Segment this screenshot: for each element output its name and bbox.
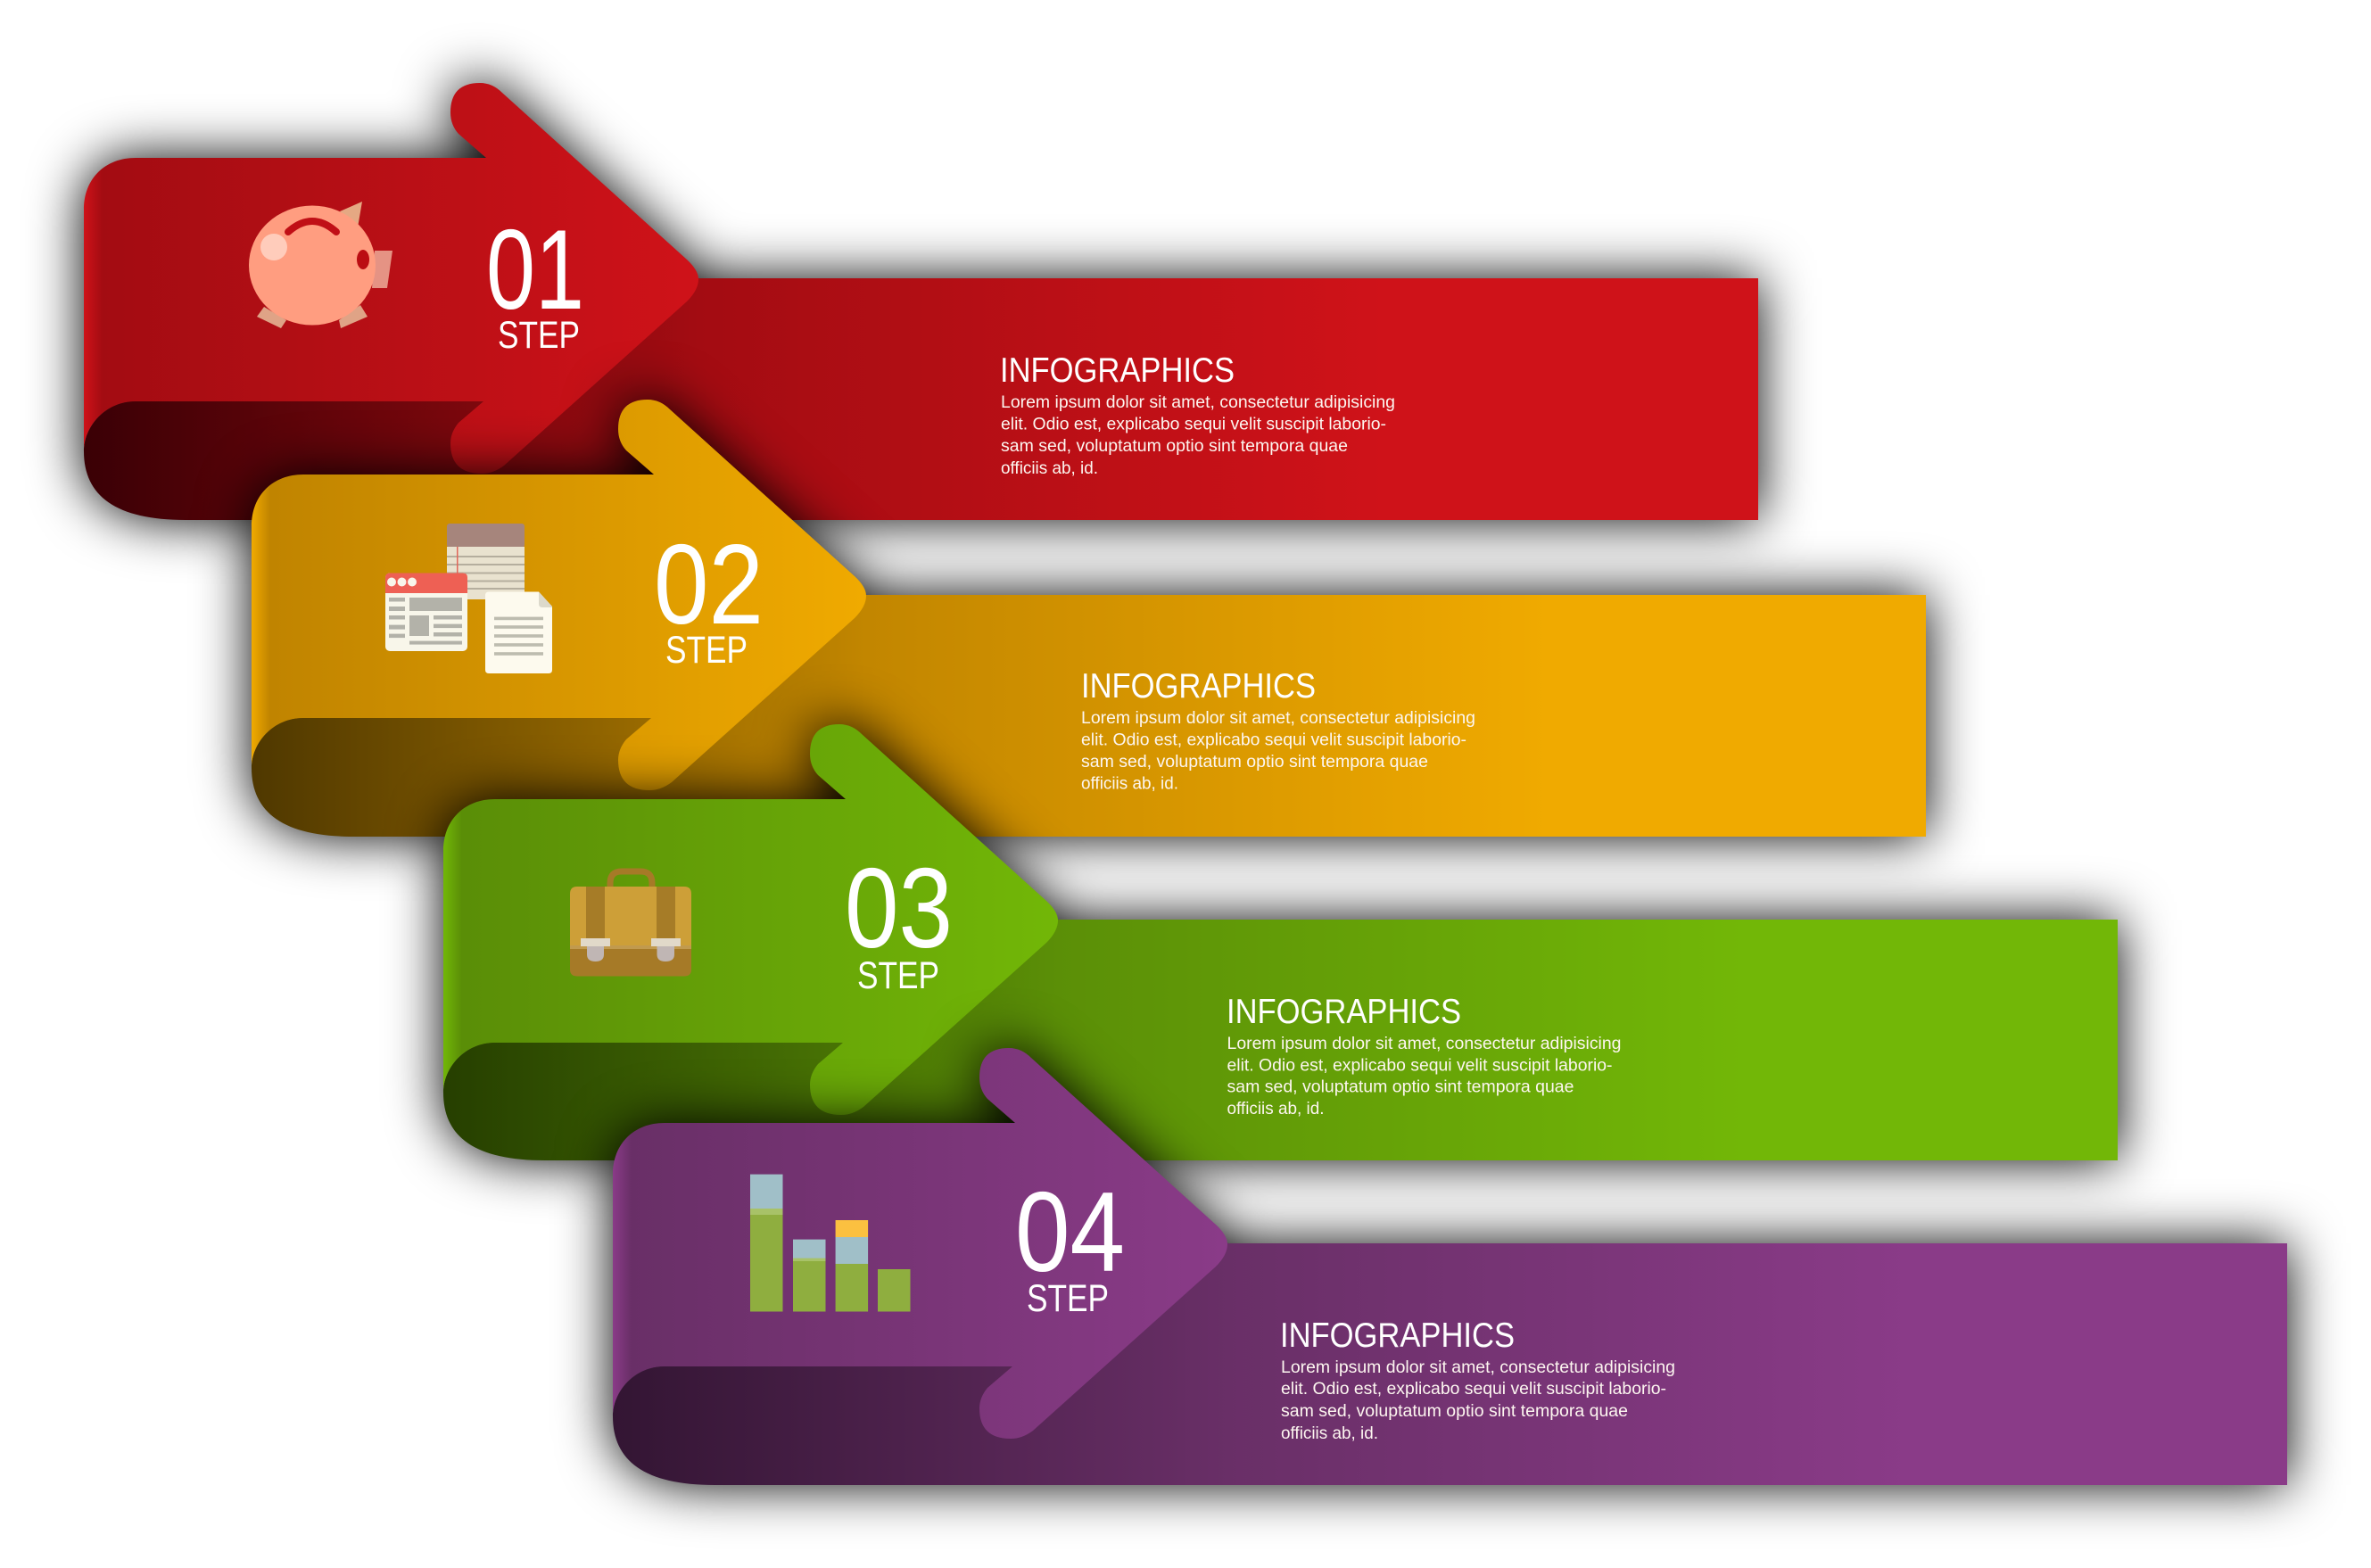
body text: sam sed, voluptatum optio sint tempora quae	[1001, 436, 1348, 456]
body text: elit. Odio est, explicabo sequi velit suscipit laborio-	[1227, 1056, 1613, 1076]
heading: INFOGRAPHICS	[1227, 993, 1461, 1031]
body text	[1281, 1358, 1675, 1443]
step number 04: 04	[1015, 1168, 1125, 1295]
step label: STEP	[665, 629, 748, 672]
icon: briefcase	[570, 871, 691, 976]
panel: step 3	[443, 724, 2118, 1160]
icon: piggy bank	[249, 202, 392, 328]
panel: step 1	[84, 83, 1758, 520]
ribbon and arrow: step 4	[613, 1048, 2287, 1485]
body text: elit. Odio est, explicabo sequi velit suscipit laborio-	[1001, 415, 1386, 434]
body text	[1081, 708, 1475, 794]
panel: step 4	[613, 1048, 2287, 1485]
ribbon band: step 2	[252, 595, 1926, 837]
body text: officiis ab, id.	[1227, 1099, 1324, 1118]
heading: INFOGRAPHICS	[1081, 667, 1316, 706]
body text: officiis ab, id.	[1281, 1424, 1378, 1443]
step label: STEP	[498, 314, 580, 357]
body text: Lorem ipsum dolor sit amet, consectetur adipisicing	[1001, 392, 1395, 412]
body text: sam sed, voluptatum optio sint tempora quae	[1081, 752, 1428, 772]
ribbon band: step 1	[84, 278, 1758, 520]
ribbon band: step 4	[613, 1243, 2287, 1485]
body text: sam sed, voluptatum optio sint tempora quae	[1227, 1077, 1574, 1097]
body text: Lorem ipsum dolor sit amet, consectetur adipisicing	[1281, 1358, 1675, 1377]
heading: INFOGRAPHICS	[1000, 351, 1235, 390]
ribbon and arrow: step 1	[84, 83, 1758, 520]
arrow: step 4	[613, 1048, 1227, 1439]
step label: STEP	[1027, 1277, 1109, 1320]
arrow: step 2	[252, 400, 866, 790]
step number 01: 01	[486, 206, 584, 333]
heading: INFOGRAPHICS	[1280, 1316, 1515, 1355]
icon: documents	[385, 524, 552, 673]
ribbon and arrow: step 2	[252, 400, 1926, 837]
body text: sam sed, voluptatum optio sint tempora quae	[1281, 1401, 1628, 1421]
arrow: step 1	[84, 83, 698, 474]
body text: Lorem ipsum dolor sit amet, consectetur adipisicing	[1227, 1034, 1622, 1053]
body text: Lorem ipsum dolor sit amet, consectetur adipisicing	[1081, 708, 1475, 728]
ribbon band: step 3	[443, 920, 2118, 1160]
step label: STEP	[857, 954, 939, 997]
ribbon and arrow: step 3	[443, 724, 2118, 1160]
step number 02: 02	[654, 521, 764, 648]
body text: elit. Odio est, explicabo sequi velit suscipit laborio-	[1281, 1379, 1666, 1399]
body text	[1227, 1034, 1622, 1118]
icon: bar chart	[750, 1175, 910, 1311]
body text: elit. Odio est, explicabo sequi velit suscipit laborio-	[1081, 730, 1466, 749]
body text: officiis ab, id.	[1001, 458, 1098, 478]
body text: officiis ab, id.	[1081, 774, 1178, 794]
arrow: step 3	[443, 724, 1058, 1115]
panel: step 2	[252, 400, 1926, 837]
step number 03: 03	[845, 845, 953, 971]
body text	[1001, 392, 1395, 478]
